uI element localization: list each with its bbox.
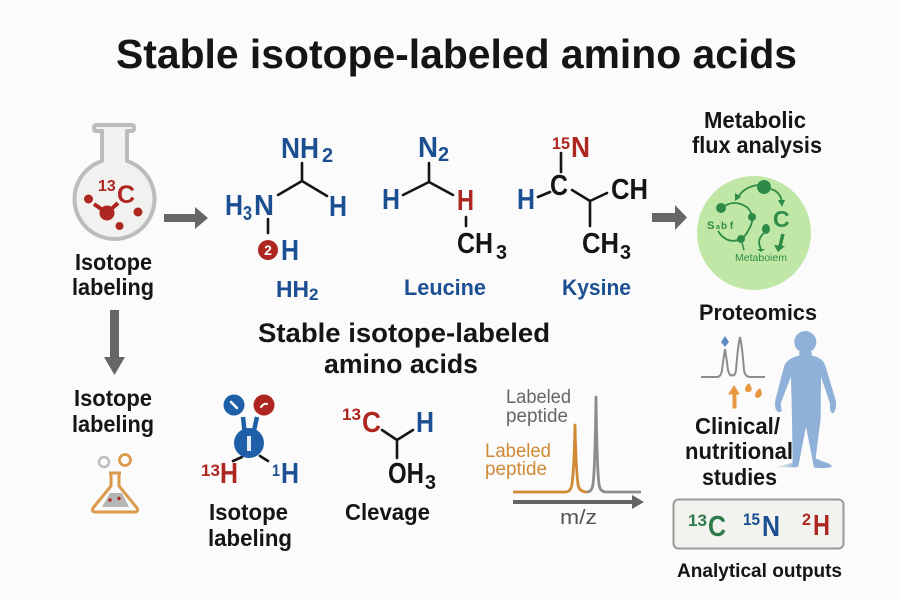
icon: conical flask with bubbles [92, 454, 138, 512]
icon: metabolic cycle disc: C [773, 206, 790, 232]
molecule: leucine: N [418, 132, 438, 164]
molecule: first amino acid: 2 [322, 145, 333, 167]
label: grey labeled peptide: peptide [506, 406, 568, 427]
molecule: first amino acid [225, 133, 347, 267]
label: Kysine: Kysine [562, 275, 631, 300]
molecule: kysine [517, 132, 648, 264]
chart: mass spectrum: m/z [560, 507, 597, 529]
molecule: kysine: N [571, 132, 590, 164]
molecule: first amino acid: 3 [243, 203, 252, 225]
molecule: first amino acid: H [225, 190, 243, 222]
icon: round-bottom flask with carbon-13: C [117, 181, 135, 209]
molecule: kysine: CH [611, 174, 648, 206]
molecule: cleavage fragment [342, 405, 436, 494]
chart: mass spectrum [485, 387, 644, 529]
icon: metabolic cycle disc [697, 176, 811, 290]
label: clinical / nutritional studies: Clinical/ [695, 413, 781, 439]
heading: central subtitle: amino acids [324, 349, 478, 379]
molecule: first amino acid: H [329, 191, 347, 223]
icon: round-bottom flask with carbon-13: 13 [98, 178, 116, 195]
panel: isotope outputs: 15 [743, 510, 760, 529]
label: isotope labeling (lower left): labeling [72, 411, 154, 437]
label: HH2: HH [276, 276, 309, 302]
heading: metabolic flux analysis: Metabolic [704, 107, 806, 133]
title: Stable isotope-labeled amino acids [116, 31, 797, 77]
molecule: first amino acid: H [281, 235, 299, 267]
label: orange labeled peptide [485, 441, 551, 480]
icon: mini spectrum with droplets [701, 336, 765, 408]
icon: metabolic cycle disc: b f [721, 221, 734, 232]
icon: human figure [775, 331, 836, 468]
icon: round-bottom flask with carbon-13 [74, 125, 154, 239]
panel: isotope outputs [674, 500, 844, 548]
heading: central subtitle: Stable isotope-labeled [258, 318, 550, 348]
molecule: labeled atom model: 13 [201, 461, 220, 480]
molecule: cleavage fragment: OH [388, 458, 424, 490]
label: analytical outputs: Analytical outputs [677, 561, 842, 582]
molecule: cleavage fragment: H [416, 407, 434, 439]
label: isotope labeling (lower left) [72, 385, 154, 437]
label: grey labeled peptide [506, 387, 571, 427]
label: Leucine: Leucine [404, 275, 486, 300]
icon: metabolic cycle disc: a [716, 224, 720, 231]
molecule: leucine [382, 132, 507, 264]
molecule: first amino acid: NH [281, 133, 319, 165]
label: isotope labeling (flask): labeling [72, 274, 154, 300]
label: clinical / nutritional studies [685, 413, 793, 490]
molecule: kysine: 3 [620, 242, 631, 264]
molecule: labeled atom model [201, 394, 299, 490]
panel: isotope outputs: 13 [688, 511, 707, 530]
label: grey labeled peptide: Labeled [506, 387, 571, 408]
molecule: leucine: H [382, 184, 400, 216]
icon: metabolic cycle disc: S [707, 220, 714, 232]
heading: proteomics: Proteomics [699, 300, 817, 325]
molecule: cleavage fragment: C [362, 407, 381, 439]
molecule: labeled atom model: 1 [272, 461, 280, 480]
molecule: kysine: C [550, 170, 568, 202]
arrow: amino acids to metabolic flux [652, 205, 687, 230]
label: isotope labeling (flask): Isotope [75, 249, 152, 275]
label: isotope labeling (model): labeling [208, 525, 292, 551]
label: HH2: 2 [309, 285, 318, 304]
label: clinical / nutritional studies: nutritional [685, 438, 793, 464]
label: orange labeled peptide: Labeled [485, 441, 551, 462]
icon: metabolic cycle disc: Metaboiem [735, 252, 787, 264]
molecule: kysine: H [517, 184, 535, 216]
molecule: first amino acid: 2 [264, 242, 272, 258]
molecule: cleavage fragment: 13 [342, 405, 361, 424]
molecule: cleavage fragment: 3 [425, 472, 436, 494]
heading: metabolic flux analysis: flux analysis [692, 132, 822, 158]
molecule: leucine: CH [457, 228, 493, 260]
molecule: labeled atom model: H [220, 458, 238, 490]
panel: isotope outputs: N [762, 511, 780, 543]
panel: isotope outputs: H [813, 510, 830, 542]
molecule: leucine: 2 [438, 144, 449, 166]
label: orange labeled peptide: peptide [485, 459, 547, 480]
arrow: down from isotope labeling [104, 310, 125, 375]
molecule: labeled atom model: H [281, 458, 299, 490]
arrow: flask to amino acids [164, 207, 208, 229]
molecule: kysine: CH [582, 228, 619, 260]
panel: isotope outputs: C [708, 511, 726, 543]
label: isotope labeling (model) [208, 499, 292, 551]
heading: metabolic flux analysis [692, 107, 822, 158]
molecule: leucine: H [457, 185, 474, 217]
label: isotope labeling (flask) [72, 249, 154, 300]
label: Clevage: Clevage [345, 499, 430, 525]
molecule: first amino acid: N [254, 190, 274, 222]
label: isotope labeling (lower left): Isotope [74, 385, 152, 411]
heading: central subtitle [258, 318, 550, 379]
molecule: kysine: 15 [552, 134, 570, 153]
label: isotope labeling (model): Isotope [209, 499, 288, 525]
panel: isotope outputs: 2 [802, 510, 811, 529]
molecule: leucine: 3 [496, 242, 507, 264]
label: clinical / nutritional studies: studies [702, 464, 777, 490]
